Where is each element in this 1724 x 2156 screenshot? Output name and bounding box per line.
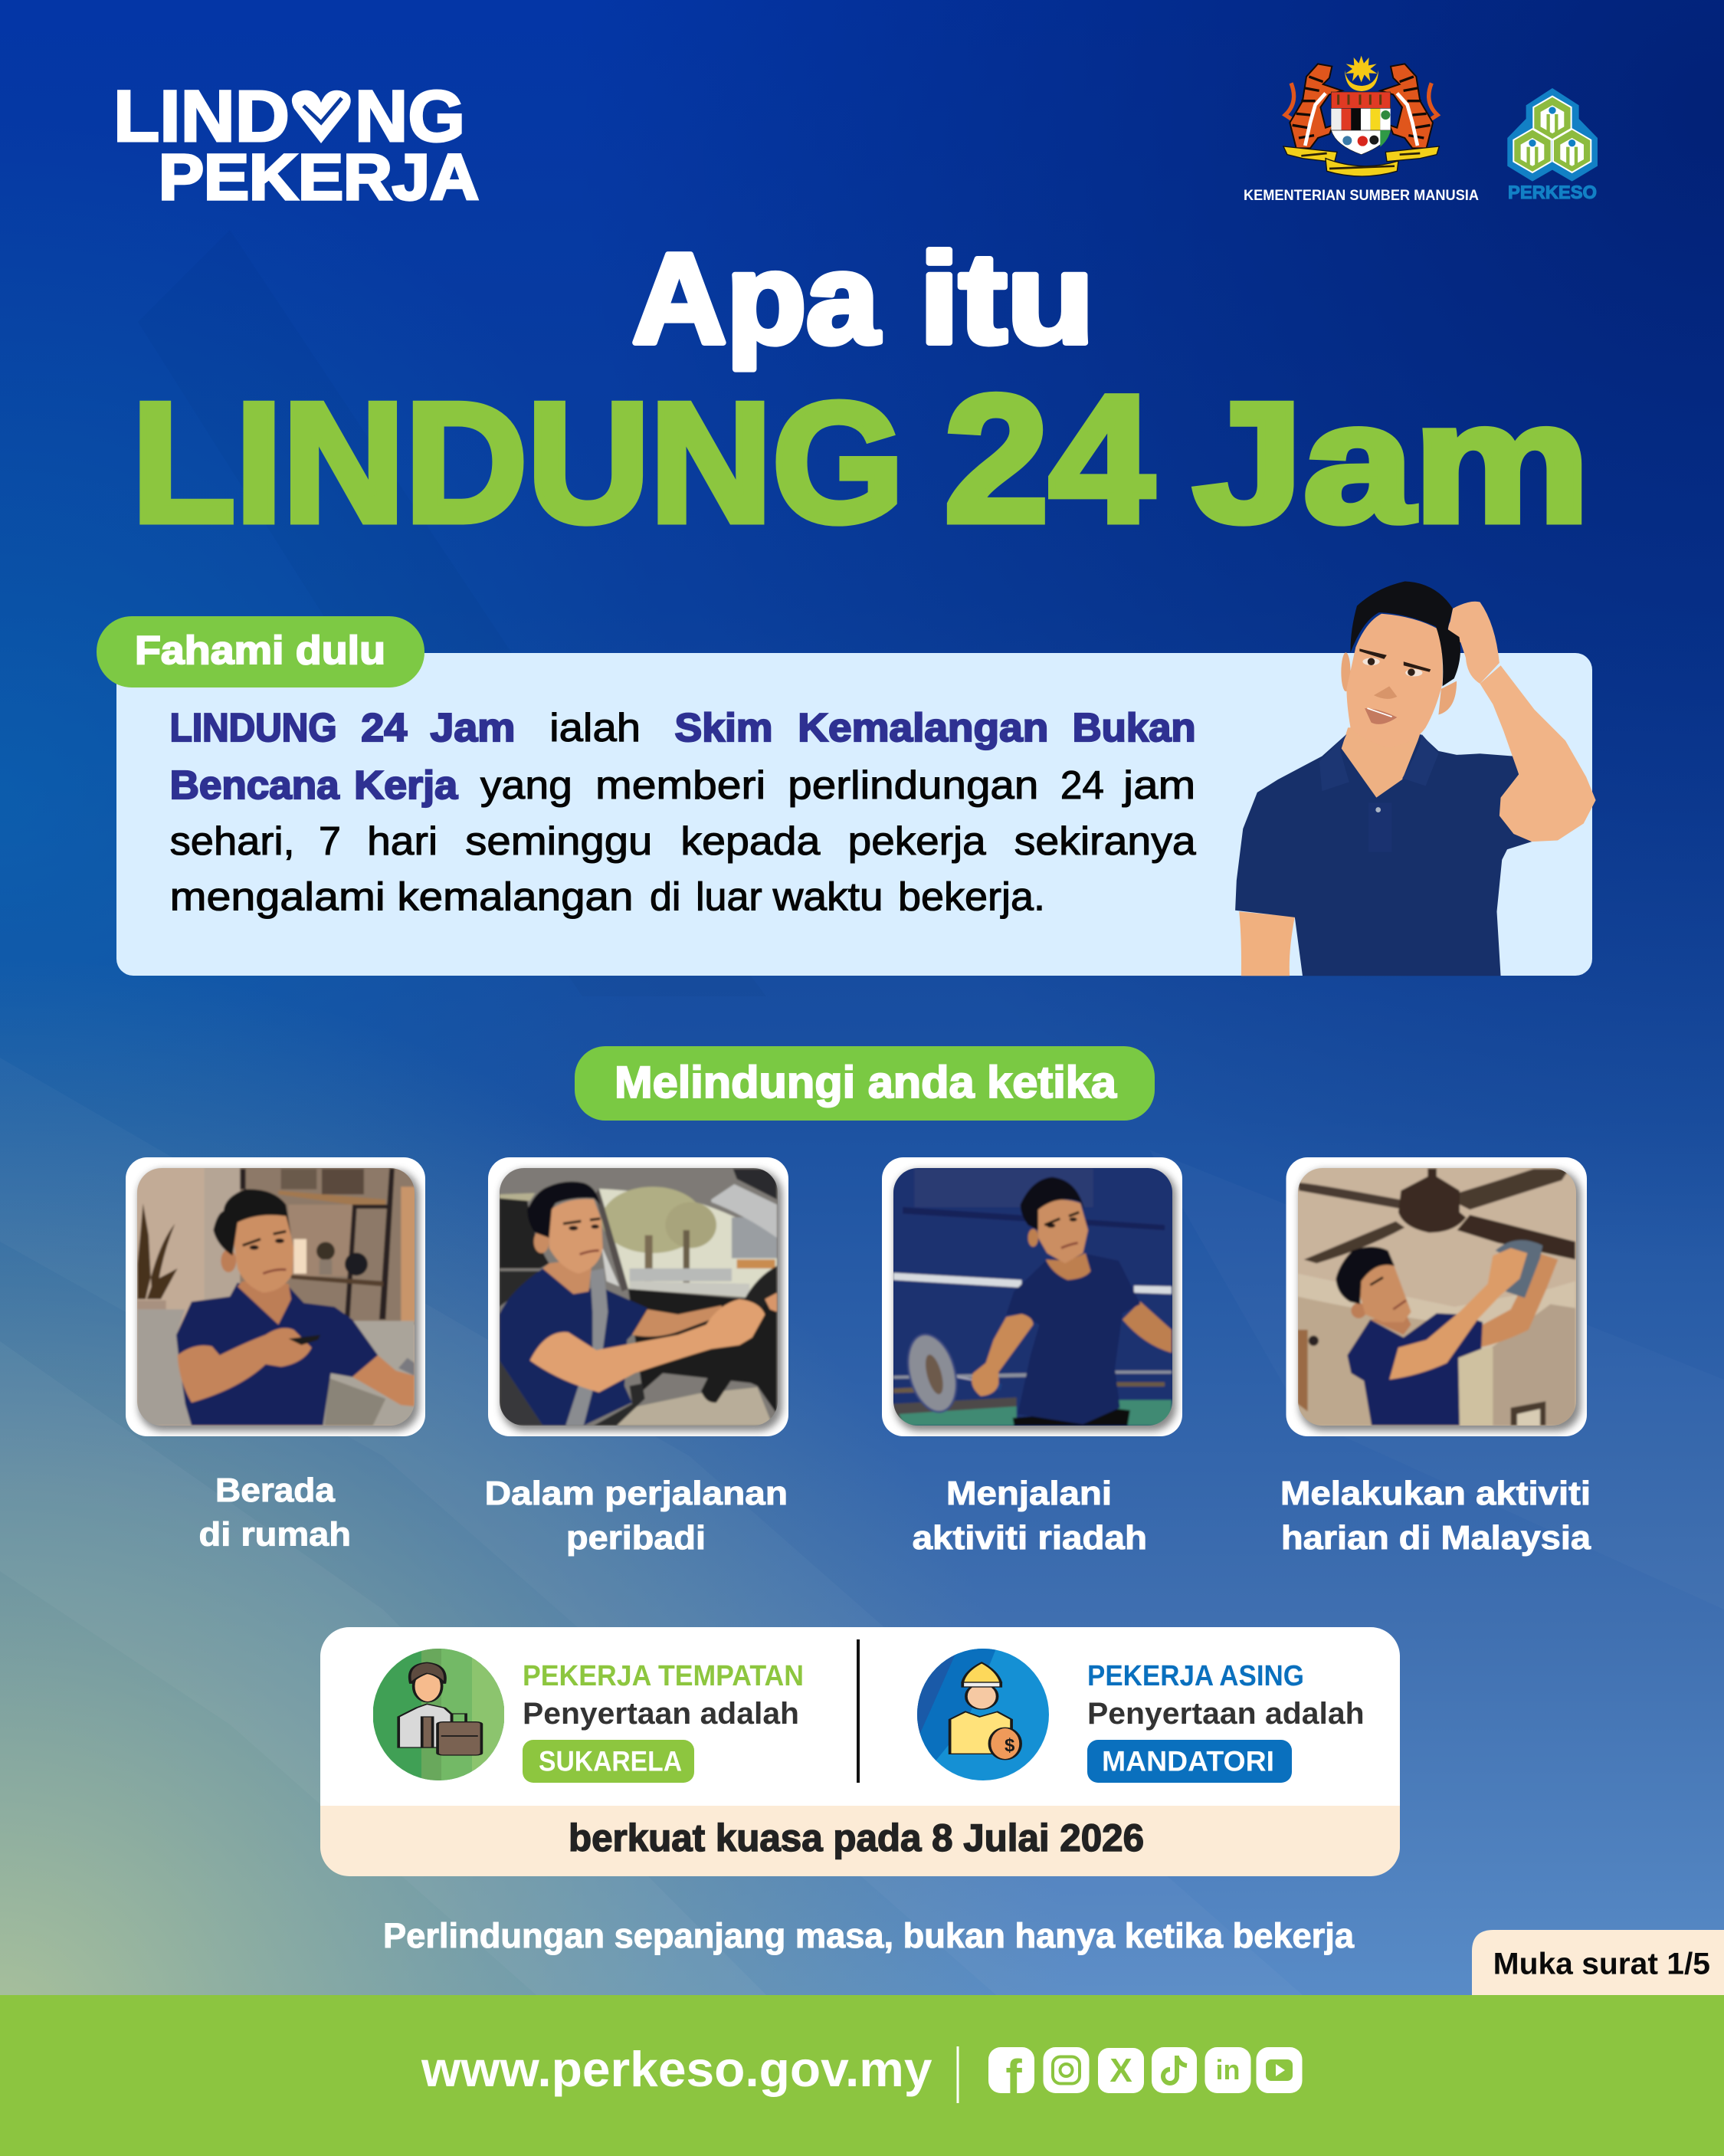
footer band xyxy=(0,1995,1724,2156)
photo: man driving xyxy=(494,1161,785,1429)
website: www.perkeso.gov.my xyxy=(421,2041,932,2097)
paragraph: LINDUNG xyxy=(170,706,337,750)
title: LINDUNG 24 Jam xyxy=(132,358,1590,560)
icon: foreign worker xyxy=(917,1649,1049,1780)
badge: Fahami dulu xyxy=(97,616,424,687)
paragraph: Bukan xyxy=(1073,706,1196,750)
photo: thinking man xyxy=(1235,581,1596,976)
paragraph: hari xyxy=(367,819,438,864)
label: at home xyxy=(199,1472,351,1554)
pill: MANDATORI: MANDATORI xyxy=(1102,1746,1274,1777)
paragraph: 7 xyxy=(319,819,341,864)
card: personal travel xyxy=(488,1157,788,1436)
paragraph: pekerja xyxy=(848,819,986,864)
paragraph: perlindungan xyxy=(788,763,1038,808)
badge: Fahami dulu: Fahami dulu xyxy=(135,628,385,673)
pill: MANDATORI xyxy=(1087,1740,1292,1783)
paragraph: sekiranya xyxy=(1014,819,1196,864)
panel: worker categories xyxy=(320,1627,1400,1876)
title: Apa itu: itu xyxy=(919,228,1094,370)
card: at home xyxy=(126,1157,425,1436)
paragraph: Kemalangan xyxy=(798,706,1048,750)
panel: explanation xyxy=(116,653,1592,976)
paragraph: kepada xyxy=(680,819,820,864)
logo: Lindung Pekerja: NG xyxy=(355,76,465,157)
paragraph: 24 xyxy=(361,706,407,750)
label: daily activity: harian di Malaysia xyxy=(1281,1519,1591,1557)
icon: foreign worker: $ xyxy=(1005,1735,1015,1756)
heading pill: Melindungi anda ketika xyxy=(575,1046,1155,1121)
paragraph: yang xyxy=(480,763,572,808)
label: recreation: aktiviti riadah xyxy=(913,1519,1147,1557)
label: daily activity: Melakukan aktiviti xyxy=(1280,1475,1591,1512)
paragraph: memberi xyxy=(595,763,765,808)
paragraph: waktu xyxy=(772,875,883,920)
logo: Lindung Pekerja: PEKERJA xyxy=(159,141,479,213)
icon: heart in logo xyxy=(292,90,351,143)
logo: Malaysian coat of arms xyxy=(1283,56,1439,176)
label: recreation: Menjalani xyxy=(946,1475,1112,1512)
icon: linkedin: in xyxy=(1215,2054,1240,2085)
text: foreign worker xyxy=(1087,1660,1365,1783)
card: recreation xyxy=(882,1157,1182,1436)
label: recreation xyxy=(913,1475,1147,1557)
pill: SUKARELA xyxy=(523,1740,694,1783)
icon: X: X xyxy=(1109,2052,1132,2089)
photo: man cleaning ceiling fan xyxy=(1291,1161,1582,1429)
paragraph: jam xyxy=(1122,763,1195,808)
photo: man on sofa xyxy=(130,1161,421,1429)
text: foreign worker: PEKERJA ASING xyxy=(1087,1660,1304,1692)
icon: tiktok xyxy=(1152,2047,1197,2093)
icon: X xyxy=(1098,2048,1144,2093)
paragraph: Kerja xyxy=(354,763,458,808)
paragraph: ialah xyxy=(549,706,641,750)
label: personal travel: peribadi xyxy=(566,1519,706,1557)
PERKESO wordmark: PERKESO xyxy=(1508,182,1597,203)
text: local worker xyxy=(523,1660,804,1783)
label: personal travel: Dalam perjalanan xyxy=(485,1475,788,1512)
paragraph: 24 xyxy=(1060,763,1104,808)
title: LINDUNG 24 Jam: LINDUNG xyxy=(132,368,904,558)
label: at home: Berada xyxy=(215,1472,336,1509)
title: LINDUNG 24 Jam: 24 xyxy=(944,358,1154,560)
page tab xyxy=(1472,1930,1724,1995)
logo: Lindung Pekerja: LIND xyxy=(113,76,290,157)
icon: instagram xyxy=(1044,2047,1090,2093)
text: local worker: PEKERJA TEMPATAN xyxy=(523,1660,804,1692)
pill: SUKARELA: SUKARELA xyxy=(539,1746,682,1777)
icon: youtube xyxy=(1257,2047,1303,2093)
paragraph: Skim xyxy=(674,706,772,750)
icon: linkedin xyxy=(1205,2047,1250,2093)
label: personal travel xyxy=(485,1475,788,1557)
label: at home: di rumah xyxy=(199,1516,351,1554)
paragraph: bekerja. xyxy=(898,875,1045,920)
paragraph: Jam xyxy=(431,706,515,750)
logo: PERKESO xyxy=(1507,88,1598,182)
photo: man playing badminton xyxy=(889,1161,1180,1429)
card: daily activity xyxy=(1286,1157,1587,1436)
paragraph: mengalami xyxy=(170,875,385,920)
paragraph: kemalangan xyxy=(397,875,633,920)
label: daily activity xyxy=(1280,1475,1591,1557)
icon: local worker xyxy=(373,1649,504,1780)
paragraph: di xyxy=(650,875,680,920)
paragraph: Bencana xyxy=(170,763,340,808)
effective date: berkuat kuasa pada 8 Julai 2026 xyxy=(569,1816,1144,1859)
paragraph xyxy=(170,706,1196,920)
title: Apa itu: Apa xyxy=(632,228,880,370)
text: local worker: Penyertaan adalah xyxy=(523,1697,799,1731)
tagline: Perlindungan sepanjang masa, bukan hanya ketika bekerja xyxy=(383,1916,1355,1955)
paragraph: sehari, xyxy=(170,819,295,864)
title: Apa itu xyxy=(632,228,1094,370)
icon: facebook: f xyxy=(1005,2049,1022,2105)
paragraph: luar xyxy=(696,875,762,920)
page tab: Muka surat 1/5 xyxy=(1493,1948,1710,1981)
icon: facebook xyxy=(988,2047,1034,2105)
paragraph: seminggu xyxy=(465,819,652,864)
title: LINDUNG 24 Jam: Jam xyxy=(1193,368,1590,558)
heading pill: Melindungi anda ketika: Melindungi anda ketika xyxy=(615,1058,1117,1108)
ministry name: KEMENTERIAN SUMBER MANUSIA xyxy=(1244,188,1479,204)
text: foreign worker: Penyertaan adalah xyxy=(1087,1697,1365,1731)
logo: Lindung Pekerja xyxy=(113,76,479,213)
